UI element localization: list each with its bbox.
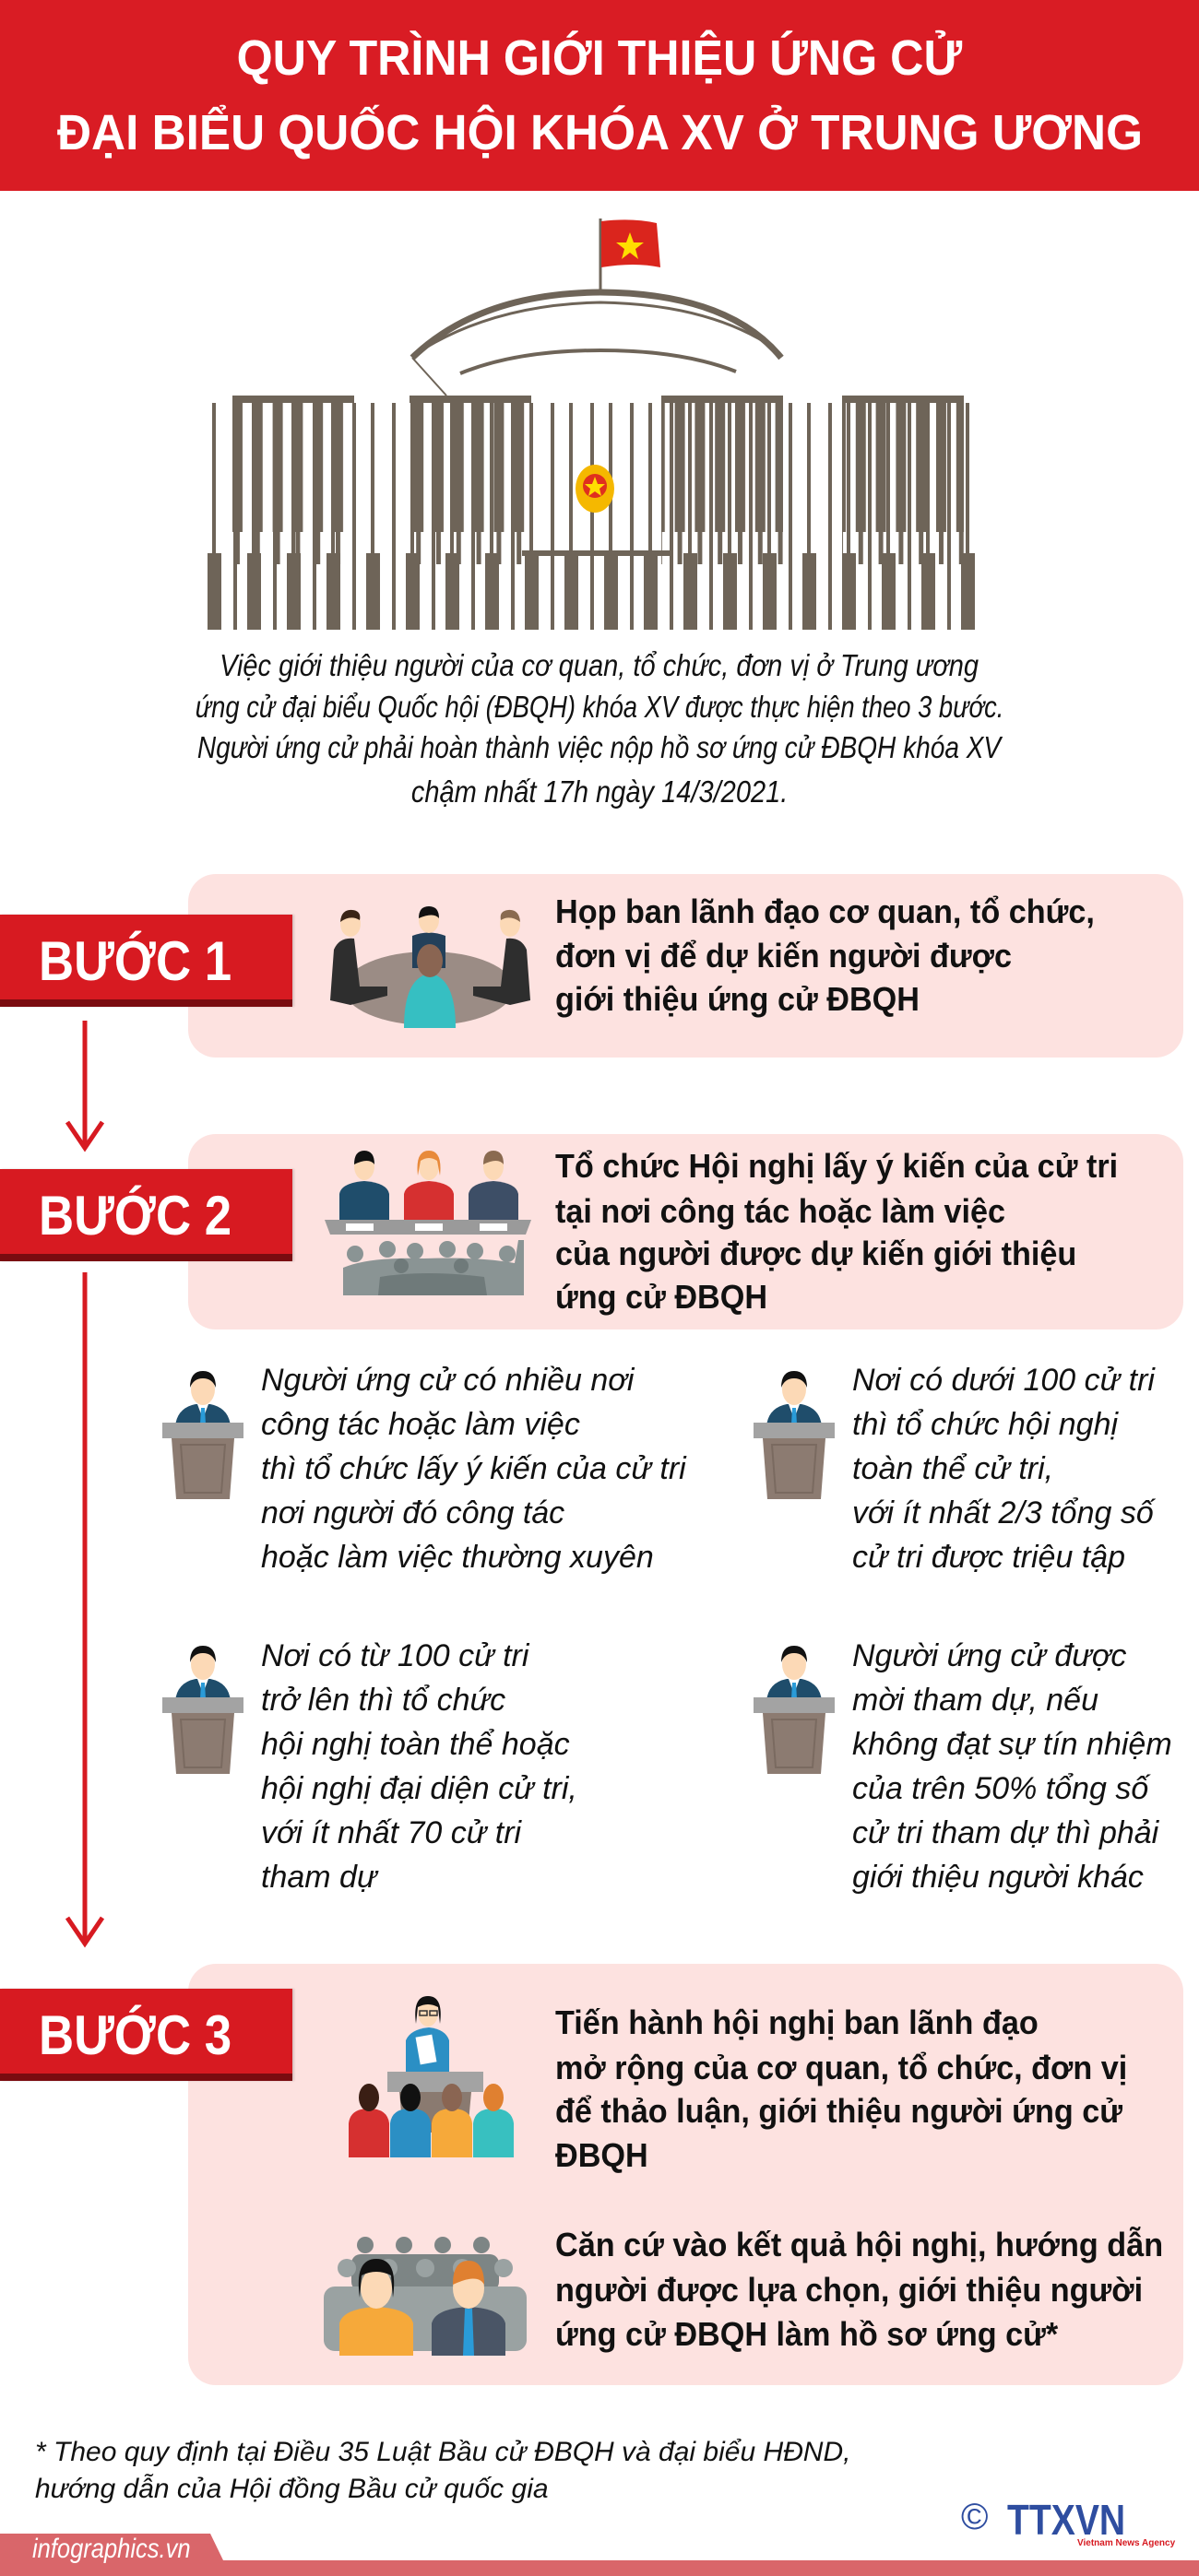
text: step 1: giới thiệu ứng cử ĐBQH xyxy=(555,980,920,1018)
label: BƯỚC 2 xyxy=(0,1169,292,1261)
sub-item 3: với ít nhất 70 cử tri xyxy=(261,1815,521,1850)
text: step 3 part 1: để thảo luận, giới thiệu người ứng cử xyxy=(555,2092,1122,2130)
text: step 2: tại nơi công tác hoặc làm việc xyxy=(555,1192,1005,1230)
flag xyxy=(600,219,660,292)
sub-item 4: giới thiệu người khác xyxy=(852,1860,1144,1895)
logo: TTXVN: Vietnam News Agency xyxy=(1077,2538,1175,2548)
sub-item 1: hoặc làm việc thường xuyên xyxy=(261,1540,654,1575)
text: step 2: của người được dự kiến giới thiệu xyxy=(555,1235,1076,1272)
panel: step 2 box xyxy=(188,1134,1183,1329)
sub-item 3: hội nghị toàn thể hoặc xyxy=(261,1727,570,1762)
emblem xyxy=(576,465,614,513)
text: step 2: ứng cử ĐBQH xyxy=(555,1278,767,1316)
logo: TTXVN: © xyxy=(961,2497,988,2537)
text: step 1: Họp ban lãnh đạo cơ quan, tổ chức, xyxy=(555,892,1095,930)
arrow: step 1 to step 2 xyxy=(65,1021,104,1152)
text: step 3 part 1: Tiến hành hội nghị ban lãnh đạo xyxy=(555,2003,1039,2041)
intro paragraph: Việc giới thiệu người của cơ quan, tổ chức, đơn vị ở Trung ương xyxy=(220,648,979,682)
icon: podium speaker xyxy=(162,1371,243,1499)
text: step 2 xyxy=(555,1147,1118,1316)
text: step 3 part 1: mở rộng của cơ quan, tổ chức, đơn vị xyxy=(555,2049,1127,2086)
sub-item 4: mời tham dự, nếu xyxy=(852,1683,1098,1718)
columns xyxy=(208,396,987,630)
label: BƯỚC 2: BƯỚC 2 xyxy=(39,1185,231,1247)
panel: step 1 box xyxy=(188,874,1183,1058)
intro paragraph: chậm nhất 17h ngày 14/3/2021. xyxy=(411,774,788,809)
text: step 3 part 2: ứng cử ĐBQH làm hồ sơ ứng cử* xyxy=(555,2315,1058,2353)
title line 2: ĐẠI BIỂU QUỐC HỘI KHÓA XV Ở TRUNG ƯƠNG xyxy=(56,105,1143,160)
icon: podium speaker xyxy=(162,1646,243,1774)
sub-item 4: cử tri tham dự thì phải xyxy=(852,1815,1158,1850)
text: step 1 xyxy=(555,892,1095,1018)
label: BƯỚC 3: BƯỚC 3 xyxy=(39,2004,231,2066)
logo: TTXVN xyxy=(961,2496,1175,2548)
icon: speaker with audience xyxy=(349,1996,514,2157)
sub-item 2: với ít nhất 2/3 tổng số xyxy=(852,1495,1154,1530)
text: step 3 part 2 xyxy=(555,2226,1163,2353)
sub-item 1: công tác hoặc làm việc xyxy=(261,1407,580,1442)
logo: TTXVN: TTXVN xyxy=(1007,2496,1125,2544)
text: Nơi có từ 100 cử tri xyxy=(261,1638,528,1673)
text: step 3 part 1 xyxy=(555,2003,1127,2174)
intro paragraph: Người ứng cử phải hoàn thành việc nộp hồ sơ ứng cử ĐBQH khóa XV xyxy=(197,730,1002,764)
sub-item 3 xyxy=(162,1638,577,1895)
title line 1: QUY TRÌNH GIỚI THIỆU ỨNG CỬ xyxy=(237,30,962,86)
text: Người ứng cử được xyxy=(852,1638,1126,1673)
icon: selected candidates in crowd xyxy=(324,2237,527,2356)
sub-item 3: trở lên thì tổ chức xyxy=(261,1683,505,1718)
text: step 1: đơn vị để dự kiến người được xyxy=(555,937,1012,975)
footnote xyxy=(35,2437,850,2504)
sub-item 3: hội nghị đại diện cử tri, xyxy=(261,1771,577,1806)
intro paragraph xyxy=(196,648,1003,809)
text: Nơi có dưới 100 cử tri xyxy=(852,1363,1155,1398)
sub-item 4: của trên 50% tổng số xyxy=(852,1771,1148,1806)
sub-item 2 xyxy=(754,1363,1157,1575)
label: BƯỚC 1: BƯỚC 1 xyxy=(39,930,231,992)
sub-item 1 xyxy=(162,1363,686,1575)
sub-item 3: tham dự xyxy=(261,1860,376,1895)
label: BƯỚC 1 xyxy=(0,915,292,1007)
icon: meeting around table xyxy=(330,906,530,1028)
text: Người ứng cử có nhiều nơi xyxy=(261,1363,634,1398)
text: step 3 part 2: người được lựa chọn, giới thiệu người xyxy=(555,2271,1143,2309)
footer bar xyxy=(0,2534,1199,2576)
dome xyxy=(412,292,781,396)
arrow: step 2 to step 3 xyxy=(65,1272,104,1947)
panel: step 3 box xyxy=(188,1964,1183,2385)
icon: conference panel and audience xyxy=(325,1151,531,1295)
sub-item 2: toàn thể cử tri, xyxy=(852,1451,1053,1486)
text: step 2: Tổ chức Hội nghị lấy ý kiến của cử tri xyxy=(555,1147,1118,1185)
text: step 3 part 2: Căn cứ vào kết quả hội nghị, hướng dẫn xyxy=(555,2226,1163,2263)
title banner xyxy=(0,0,1199,191)
label: BƯỚC 3 xyxy=(0,1989,292,2081)
sub-item 1: nơi người đó công tác xyxy=(261,1495,564,1530)
text: step 3 part 1: ĐBQH xyxy=(555,2136,648,2174)
sub-item 1: thì tổ chức lấy ý kiến của cử tri xyxy=(261,1451,686,1486)
sub-item 4 xyxy=(754,1638,1172,1895)
icon: podium speaker xyxy=(754,1371,835,1499)
sub-item 2: thì tổ chức hội nghị xyxy=(852,1407,1118,1442)
sub-item 4: không đạt sự tín nhiệm xyxy=(852,1727,1172,1762)
illustration: National Assembly building xyxy=(208,219,975,630)
icon: podium speaker xyxy=(754,1646,835,1774)
footnote: * Theo quy định tại Điều 35 Luật Bầu cử ĐBQH và đại biểu HĐND, xyxy=(35,2437,850,2467)
sub-item 2: cử tri được triệu tập xyxy=(852,1540,1125,1575)
footer source text: infographics.vn xyxy=(32,2534,191,2564)
intro paragraph: ứng cử đại biểu Quốc hội (ĐBQH) khóa XV được thực hiện theo 3 bước. xyxy=(196,690,1003,724)
footnote: hướng dẫn của Hội đồng Bầu cử quốc gia xyxy=(35,2474,549,2504)
